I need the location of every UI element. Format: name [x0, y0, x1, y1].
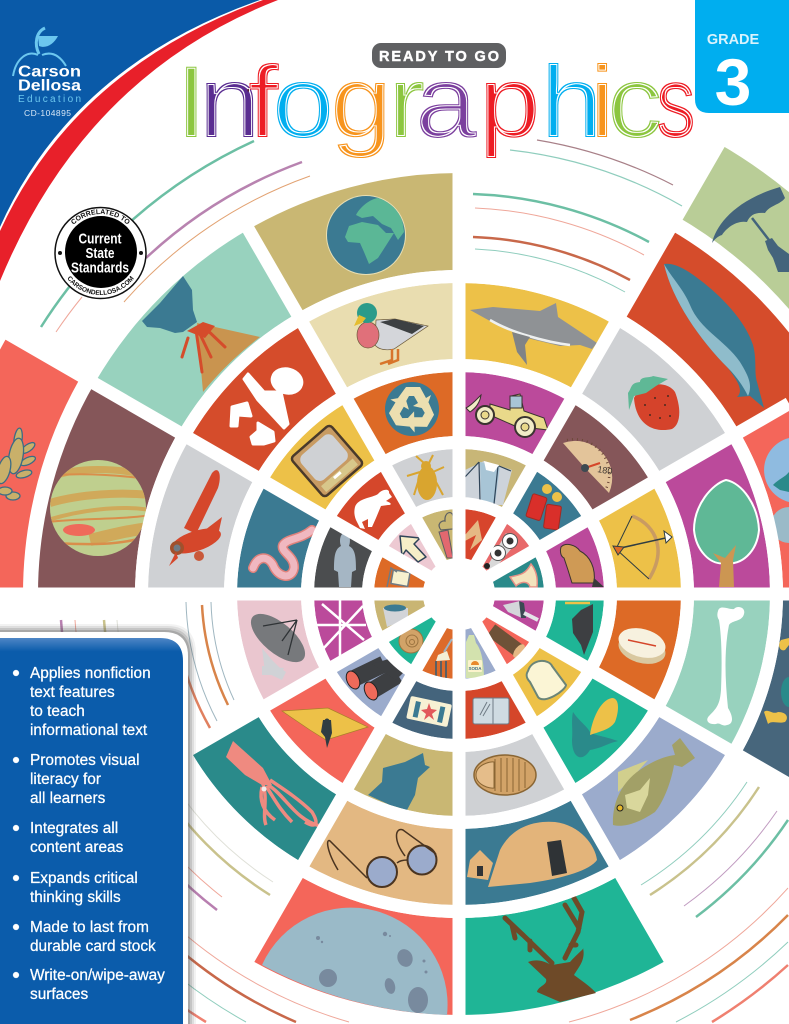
- grade tab: [695, 0, 789, 119]
- segment: soda bottle: [438, 621, 502, 689]
- bullet: nonfiction text features: text features: [30, 684, 115, 701]
- publisher logo: Dellosa: [18, 78, 81, 94]
- title: f: [248, 46, 279, 159]
- icon: apple: [13, 28, 66, 76]
- badge: correlated to current state standards: State: [86, 245, 114, 262]
- segment: volcano: [94, 201, 321, 454]
- series label: Ready to Go: READY TO GO: [379, 49, 499, 65]
- segment: howling wolf: [348, 731, 459, 816]
- bullet: critical thinking: [13, 870, 138, 906]
- segment: hang glider: [252, 657, 391, 786]
- segment: book: [438, 667, 532, 756]
- segment: cursor arrow: [385, 515, 453, 578]
- bullet: write-on wipe-away: surfaces: [30, 986, 88, 1003]
- segment: scorpions on navy: [740, 594, 789, 804]
- badge: correlated to current state standards: [54, 206, 147, 300]
- title: o: [272, 46, 334, 159]
- segment: firecrackers: [501, 468, 594, 558]
- bullet: content areas: Integrates all: [30, 820, 118, 837]
- grade tab: GRADE: [707, 32, 760, 48]
- segment: trilobite: [431, 712, 570, 842]
- segment: fern leaves: [0, 334, 81, 594]
- segment: globe Earth: [254, 173, 452, 310]
- title: p: [479, 46, 540, 159]
- segment: ammonite: [380, 600, 443, 668]
- series label: Ready to Go: [372, 43, 506, 68]
- segment: graduation cap: [543, 594, 604, 666]
- title: i: [590, 46, 614, 159]
- segment: speedometer: [527, 402, 666, 531]
- segment: bulldozer: [459, 372, 570, 457]
- segment: shark: [459, 283, 614, 390]
- bullet: durable card stock: Made to last from: [30, 919, 149, 936]
- badge: correlated to current state standards: CARSONDELLOSA.COM: [68, 276, 134, 295]
- bullet: durable card stock: [13, 919, 156, 955]
- bullet: nonfiction text features: to teach: [30, 703, 85, 720]
- segment: apple core: [486, 552, 554, 615]
- segment: polar bear: [333, 459, 423, 552]
- bullet: write-on wipe-away: Write-on/wipe-away: [30, 967, 165, 984]
- segment: beaver: [532, 522, 621, 615]
- segment: fish: [557, 696, 728, 884]
- segment: recycling symbol: [348, 346, 487, 476]
- publisher logo: CD-104895: [24, 108, 71, 118]
- segment: flashlight: [490, 594, 544, 636]
- bullet: content areas: [13, 820, 124, 856]
- bullet: content areas: content areas: [30, 839, 124, 856]
- segment: binoculars: [324, 630, 417, 720]
- segment: insect: [386, 432, 480, 521]
- title: c: [608, 46, 663, 159]
- segment: soda bottle: SODA: [468, 666, 482, 671]
- segment: globe on salmon: [702, 384, 789, 636]
- panel: features list: [0, 624, 196, 1024]
- bullet: visual literacy: all learners: [30, 790, 106, 807]
- segment: tree: [635, 438, 789, 627]
- bullet: visual literacy: literacy for: [30, 771, 101, 788]
- segment: satellite dish: [211, 566, 341, 705]
- segment: corn: [522, 662, 651, 801]
- segment: strawberry: [561, 325, 749, 496]
- segment: umbrella: [648, 144, 789, 397]
- segment: planet Jupiter: [38, 384, 178, 594]
- segment: picture frame: [374, 552, 428, 594]
- title: g: [330, 46, 392, 159]
- segment: bread: [495, 636, 585, 729]
- bullet: nonfiction text features: [13, 665, 151, 739]
- segment: person silhouette: [314, 522, 375, 594]
- segment: eyeglasses: [304, 798, 459, 905]
- segment: bow and arrow: [577, 483, 707, 622]
- segment: log: [465, 610, 533, 673]
- segment: fossil tooth: [459, 509, 502, 563]
- segment: earth dome lodge: [426, 770, 614, 941]
- title: s: [656, 46, 696, 159]
- title: r: [388, 46, 425, 159]
- segment: television: [267, 387, 396, 526]
- segment: white shapes: [190, 304, 361, 492]
- segment: speedometer: 180: [597, 464, 613, 477]
- bullet: nonfiction text features: informational text: [30, 722, 148, 739]
- badge: correlated to current state standards: Standards: [71, 260, 129, 276]
- grade tab: 3: [715, 45, 751, 119]
- segment: duck: [304, 247, 492, 418]
- badge: correlated to current state standards: Current: [78, 230, 122, 248]
- segment: worm: [237, 483, 322, 594]
- segment: fork: [416, 625, 459, 679]
- segment: movie ticket: [386, 678, 459, 739]
- segment: eyes: [475, 520, 538, 588]
- publisher logo: Carson: [18, 64, 81, 80]
- segment: compass: [596, 594, 681, 705]
- segment: test tube: [416, 499, 480, 567]
- publisher logo: Education: [18, 94, 81, 105]
- bullet: visual literacy: Promotes visual: [30, 752, 140, 769]
- bullet: critical thinking: Expands critical: [30, 870, 138, 887]
- title: n: [199, 46, 260, 159]
- blue corner with red swoosh: [0, 0, 278, 281]
- badge: correlated to current state standards: CORRELATED TO: [71, 209, 130, 224]
- segment: deer: [417, 837, 670, 1024]
- segment: shirt: [459, 449, 532, 510]
- segment: moon: [248, 875, 459, 1015]
- bullet: write-on wipe-away: [13, 967, 165, 1003]
- segment: bone: [662, 594, 770, 750]
- title: [176, 46, 696, 159]
- bullet: nonfiction text features: Applies nonfiction: [30, 665, 151, 682]
- segment: white asterisk: [297, 573, 386, 666]
- segment: whale: [599, 229, 789, 456]
- title: I: [176, 46, 207, 159]
- title: h: [541, 46, 602, 159]
- segment: paper roll: [364, 573, 432, 636]
- segment: rocket plane: [148, 438, 256, 594]
- title: a: [415, 46, 478, 159]
- segment: squid: [169, 692, 357, 863]
- bullet: visual literacy: [13, 752, 140, 807]
- bullet: critical thinking: thinking skills: [30, 889, 121, 906]
- publisher logo: [13, 28, 81, 118]
- bullet: durable card stock: durable card stock: [30, 938, 156, 955]
